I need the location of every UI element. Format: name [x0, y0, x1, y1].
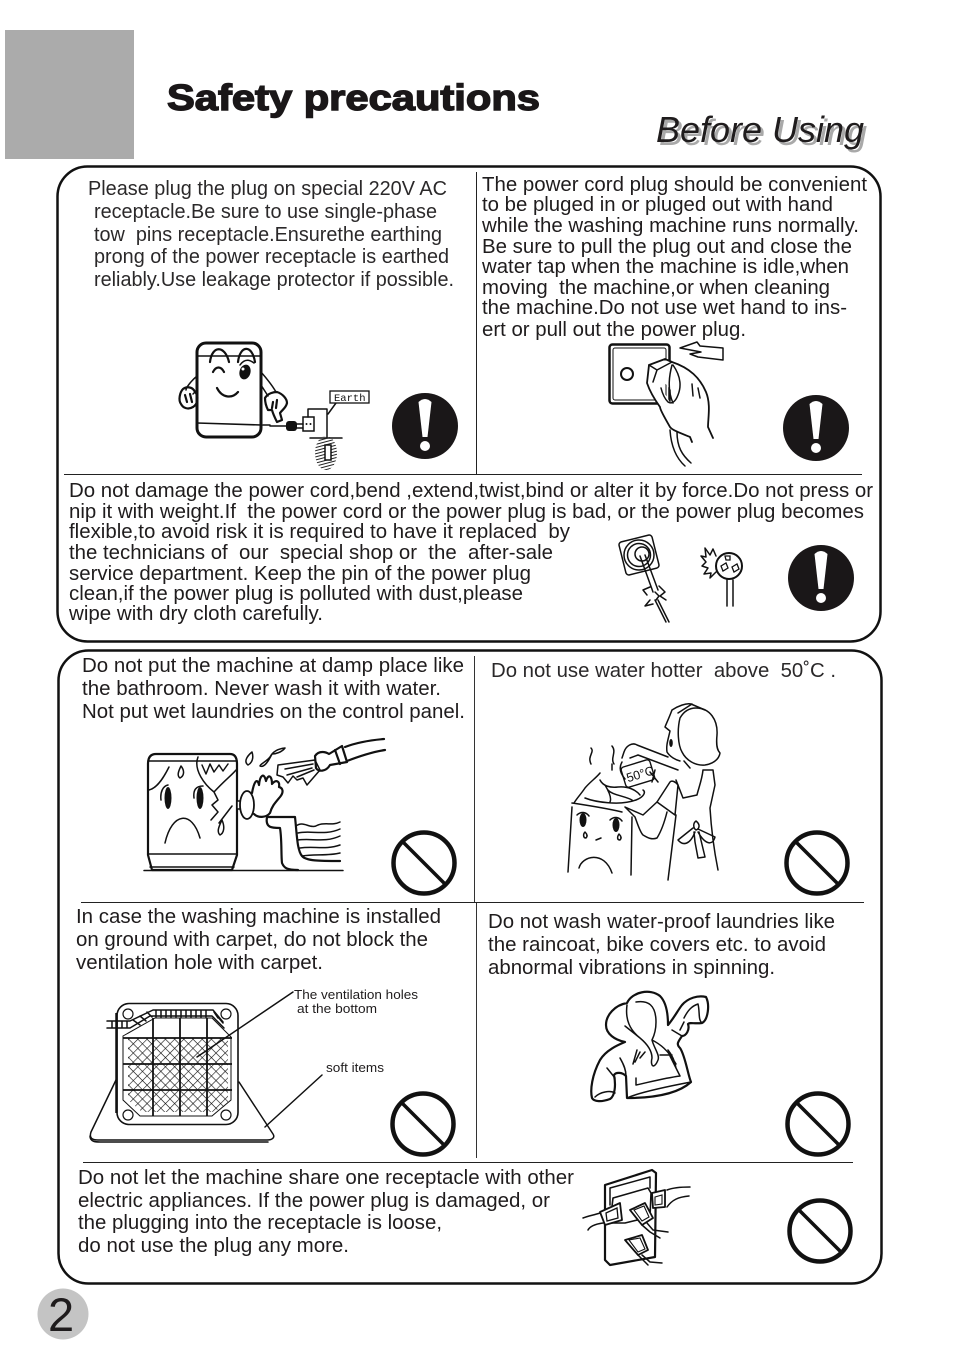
illustration: woman pouring hot water into washer	[568, 704, 720, 880]
text: power cord plug: water tap when the machine is idle,when	[481, 256, 849, 278]
text: power cord plug: moving the machine,or when cleaning	[482, 277, 830, 299]
text: do not damage the cord: service department. Keep the pin of the power plug	[69, 563, 531, 585]
icon: prohibition sign	[392, 1094, 454, 1154]
section heading: Before Using: Before Using	[656, 109, 864, 150]
text: power cord plug	[481, 174, 867, 341]
illustration: sad washer sprayed with water	[144, 739, 385, 870]
label: Earth: Earth	[334, 393, 366, 405]
text: do not damage the cord	[68, 480, 873, 625]
text: carpet ventilation: ventilation hole with carpet.	[76, 952, 323, 974]
icon: prohibition sign	[394, 832, 454, 894]
text: damp place: Do not put the machine at damp place like	[82, 655, 464, 677]
label: soft items: soft items	[326, 1060, 385, 1075]
text: do not damage the cord: nip it with weight.If the power cord or the power plug is bad, or the power plug becomes	[69, 501, 864, 523]
page number badge: 2	[48, 1288, 74, 1341]
illustration: washer base on soft items	[90, 992, 322, 1142]
text: water-proof laundries: abnormal vibrations in spinning.	[488, 957, 775, 979]
text: do not damage the cord: flexible,to avoid risk it is required to have it replaced by	[69, 521, 570, 543]
text: carpet ventilation	[76, 906, 441, 974]
text: special receptacle: Please plug the plug on special 220V AC	[88, 178, 447, 200]
text: carpet ventilation: on ground with carpet, do not block the	[76, 929, 428, 951]
text: power cord plug: The power cord plug should be convenient	[482, 174, 867, 196]
text: shared receptacle: do not use the plug any more.	[78, 1235, 349, 1257]
text: special receptacle: receptacle.Be sure to use single-phase	[94, 201, 437, 223]
text: do not damage the cord: the technicians of our special shop or the after-sale	[69, 542, 553, 564]
text: water-proof laundries	[488, 911, 835, 979]
text: do not damage the cord: wipe with dry cloth carefully.	[68, 603, 323, 625]
page number badge	[38, 1288, 88, 1341]
text: do not damage the cord: Do not damage the power cord,bend ,extend,twist,bind or alter it by force.Do not press or	[69, 480, 873, 502]
text: shared receptacle	[78, 1167, 574, 1257]
label: ventilation holes	[294, 987, 419, 1016]
text: special receptacle: prong of the power receptacle is earthed	[94, 246, 449, 268]
illustration: damaged cord at socket	[618, 534, 669, 622]
icon: prohibition sign	[788, 1094, 848, 1154]
text: damp place: the bathroom. Never wash it with water.	[82, 678, 441, 700]
text: special receptacle: reliably.Use leakage protector if possible.	[94, 269, 454, 291]
panel: power precautions	[58, 166, 880, 642]
illustration: overloaded receptacle	[583, 1170, 690, 1265]
section heading: Before Using: Before Using	[659, 112, 867, 153]
text: power cord plug: ert or pull out the power plug.	[482, 319, 746, 341]
text: shared receptacle: the plugging into the receptacle is loose,	[78, 1212, 442, 1234]
label: 50 degrees C: 50°C	[625, 764, 656, 785]
icon: mandatory exclamation	[783, 395, 849, 461]
title: Safety precautions	[167, 77, 540, 118]
text: shared receptacle: Do not let the machine share one receptacle with other	[78, 1167, 574, 1189]
text: water-proof laundries: Do not wash water-proof laundries like	[488, 911, 835, 933]
text: shared receptacle: electric appliances. If the power plug is damaged, or	[78, 1190, 550, 1212]
illustration: damaged plug with sparks	[701, 548, 742, 606]
label: Earth	[330, 391, 369, 405]
label: ventilation holes: at the bottom	[297, 1001, 377, 1016]
grey corner block	[5, 30, 134, 159]
illustration: washer plugged into earthed socket	[180, 343, 369, 470]
text: water temperature: Do not use water hotter above 50˚C .	[491, 660, 836, 682]
illustration: raincoat	[591, 992, 708, 1101]
panel: installation and use prohibitions	[58, 650, 882, 1284]
text: special receptacle: tow pins receptacle.Ensurethe earthing	[94, 224, 442, 246]
text: damp place: Not put wet laundries on the control panel.	[82, 701, 465, 723]
illustration: hand pulling plug from socket	[610, 342, 723, 466]
text: special receptacle	[88, 178, 454, 291]
text: do not damage the cord: clean,if the power plug is polluted with dust,please	[69, 583, 523, 605]
icon: mandatory exclamation	[392, 393, 458, 459]
label: ventilation holes: The ventilation holes	[294, 987, 419, 1002]
icon: mandatory exclamation	[788, 545, 854, 611]
icon: prohibition sign	[786, 832, 848, 894]
text: carpet ventilation: In case the washing machine is installed	[76, 906, 441, 928]
text: water-proof laundries: the raincoat, bike covers etc. to avoid	[488, 934, 826, 956]
text: power cord plug: Be sure to pull the plug out and close the	[482, 236, 852, 258]
text: power cord plug: to be pluged in or pluged out with hand	[482, 194, 833, 216]
icon: prohibition sign	[790, 1200, 850, 1262]
text: damp place	[82, 655, 465, 723]
text: power cord plug: while the washing machine runs normally.	[481, 215, 859, 237]
text: power cord plug: the machine.Do not use wet hand to ins-	[482, 297, 847, 319]
